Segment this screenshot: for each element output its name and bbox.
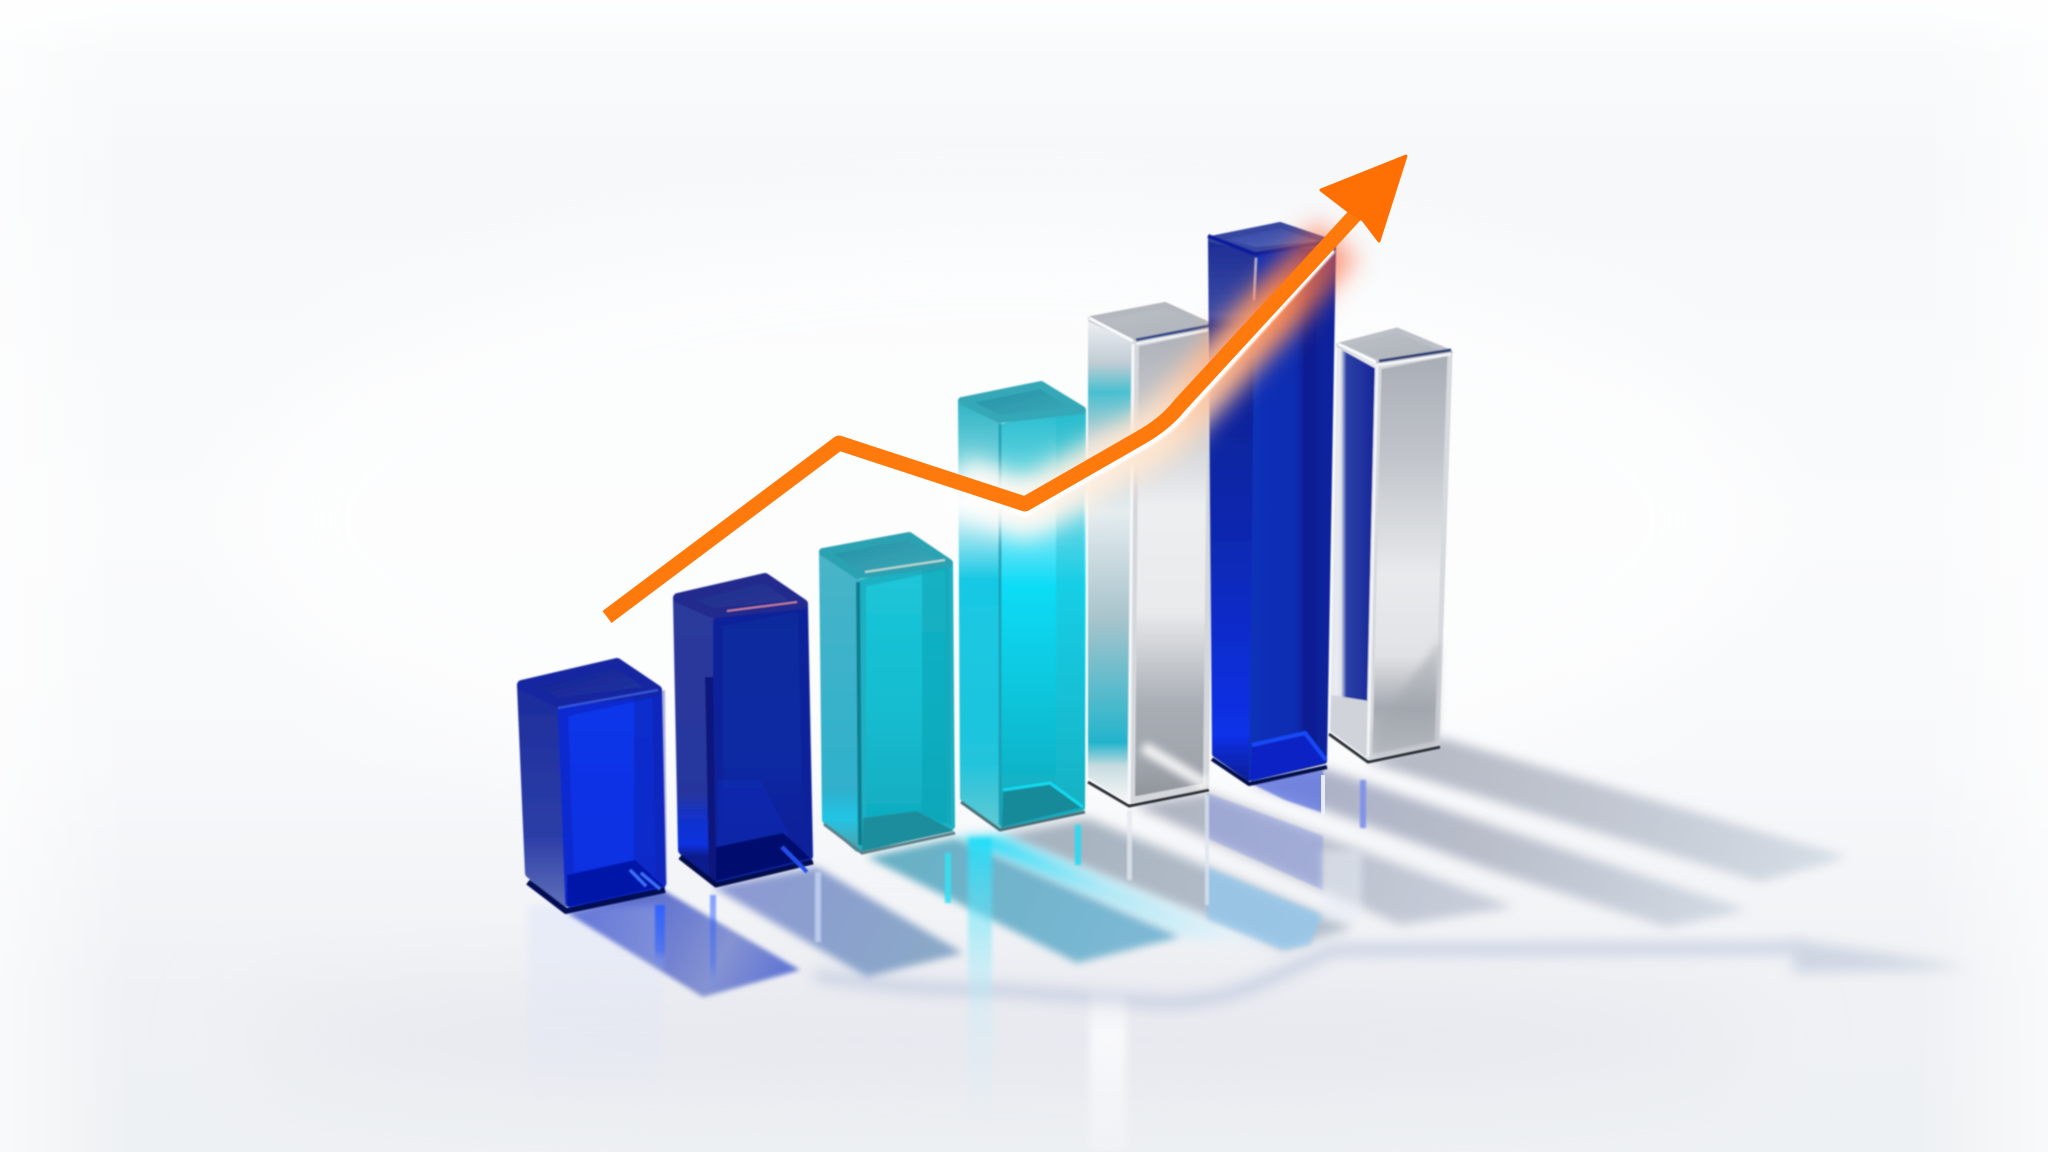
inner dark stripe	[705, 677, 716, 882]
bottom glass highlight	[782, 847, 807, 872]
top face	[1211, 225, 1333, 250]
silver streak under bar 5 right	[1205, 795, 1209, 905]
shadow of bar 2	[713, 867, 963, 977]
shadow of arrow line	[815, 948, 1800, 1003]
right face	[1370, 353, 1450, 757]
streak under bar 2	[815, 872, 821, 942]
diagonal refraction	[718, 780, 790, 848]
cyan streak under bar 4	[1075, 825, 1081, 865]
base edge	[1329, 734, 1440, 762]
left face lower sheen	[1330, 695, 1375, 758]
top front navy edge	[1379, 350, 1451, 361]
right face	[862, 565, 951, 848]
base edge	[1212, 759, 1327, 784]
shadow of bar 1	[567, 890, 800, 997]
cyan light strip	[955, 835, 1283, 950]
top front blue edge	[1136, 325, 1213, 340]
bar 7: silver and navy	[1329, 330, 1451, 762]
right face	[563, 692, 661, 902]
right refracting band	[634, 690, 667, 885]
front edge highlight	[1254, 258, 1256, 300]
bar 5: silver	[1088, 305, 1213, 806]
top edge highlight	[1089, 318, 1133, 341]
faint reflection of bar 1	[528, 905, 662, 1135]
teal streak under bar 3	[945, 853, 951, 903]
bar 2: navy glass	[678, 578, 813, 885]
floor highlight	[1003, 783, 1083, 807]
top face	[1339, 330, 1450, 361]
base edge	[528, 882, 665, 911]
left face	[678, 599, 713, 878]
front edge	[998, 424, 1002, 825]
left face	[823, 552, 858, 848]
shadow of bar 7	[1367, 738, 1847, 882]
left face	[1332, 346, 1377, 757]
floor reflections	[528, 770, 1366, 1152]
left face	[522, 686, 565, 902]
line glow halo	[955, 240, 1338, 510]
tint on shadow of bar 5	[1207, 793, 1323, 890]
streak under bar 6	[1321, 775, 1325, 815]
glass floor	[862, 811, 954, 851]
top face	[823, 536, 949, 575]
top front edge	[1208, 236, 1336, 254]
front edge	[1368, 364, 1377, 757]
white edge below	[1379, 354, 1451, 365]
left face	[1211, 240, 1255, 778]
diagonal bottom shade	[1372, 640, 1440, 757]
cyan streak under bar 3	[968, 838, 992, 1138]
top highlight	[727, 602, 797, 611]
shadow of bar 6	[1250, 768, 1747, 927]
right inner band	[1056, 408, 1084, 805]
right face	[718, 606, 808, 878]
shadow of arrow head	[1793, 940, 1970, 973]
right inner band	[922, 565, 951, 825]
bar 6: tall navy glass	[1208, 225, 1336, 784]
top face	[522, 663, 657, 703]
floor shadows	[567, 738, 1970, 1003]
front edge	[1129, 344, 1133, 803]
left face	[1091, 320, 1133, 800]
tint on shadow of bar 4	[1207, 867, 1323, 950]
glass floor	[716, 833, 810, 881]
shadow of bar 4	[1000, 818, 1353, 950]
blue patch under bar 6	[1250, 770, 1323, 813]
top edge highlight	[1338, 344, 1376, 362]
bar 4: cyan glass	[961, 385, 1085, 830]
top highlight	[865, 560, 945, 572]
shadow of bar 3	[867, 838, 1180, 963]
base edge	[824, 824, 955, 853]
top highlight	[558, 690, 658, 708]
top face	[678, 578, 803, 613]
white edge below	[1136, 329, 1213, 344]
orange polyline	[607, 214, 1356, 617]
glass floor bright	[1250, 733, 1326, 781]
pale blue streak under bar 1	[710, 895, 716, 995]
arrow head	[1321, 156, 1406, 241]
glass floor	[1002, 783, 1083, 827]
glass floor	[567, 860, 664, 907]
right face	[1252, 246, 1333, 778]
top face	[1091, 305, 1211, 338]
lower white glow edge	[965, 250, 1333, 514]
right face	[1004, 412, 1082, 825]
top face	[962, 385, 1082, 419]
blue streak under bar 7	[1360, 780, 1366, 828]
silver streak under bar 5	[1127, 810, 1132, 880]
silver sparkle reflections	[1322, 850, 1362, 920]
base edge	[961, 802, 1085, 830]
blue streak under bar 1	[655, 905, 665, 970]
diagonal bottom sheen	[1143, 747, 1207, 785]
bottom glass highlight	[630, 870, 660, 889]
trend line with arrow	[607, 156, 1406, 617]
base edge	[680, 857, 813, 885]
floor highlight	[1252, 733, 1326, 760]
front edge	[858, 582, 860, 845]
base edge	[1088, 782, 1209, 806]
bar 1: blue glass	[522, 663, 667, 911]
right face	[1132, 328, 1211, 800]
bar 3: teal glass	[823, 536, 955, 853]
shadow of bar 5	[1133, 793, 1514, 925]
white reflection streak	[1090, 985, 1126, 1152]
left face	[962, 401, 1000, 825]
